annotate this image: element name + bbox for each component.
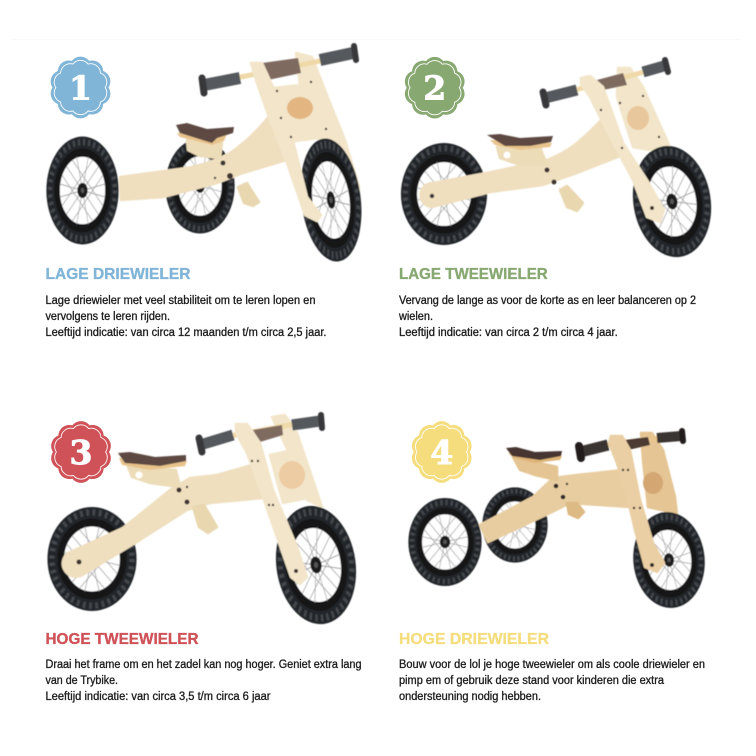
logo bbox=[287, 97, 313, 119]
right fork arm and panel bbox=[641, 433, 677, 515]
description: ondersteuning nodig hebben. bbox=[399, 691, 541, 703]
badge 4 bbox=[412, 421, 472, 483]
description: Leeftijd indicatie: van circa 2 t/m circa 4 jaar. bbox=[399, 327, 618, 339]
seat post bbox=[497, 147, 547, 165]
holes bbox=[76, 460, 298, 573]
left fork arm bbox=[581, 76, 664, 222]
right fork arm and panel bbox=[273, 53, 359, 208]
description: van de Trybike. bbox=[46, 675, 118, 687]
frame bbox=[63, 465, 263, 577]
seat post bbox=[187, 140, 222, 158]
left fork arm bbox=[251, 63, 321, 221]
heading: LAGE TWEEWIELER bbox=[399, 266, 548, 283]
description: pimp em of gebruik deze stand voor kinderen die extra bbox=[399, 675, 665, 687]
footrest tab bbox=[193, 505, 217, 533]
seat bbox=[490, 140, 552, 150]
logo bbox=[643, 472, 663, 494]
rear wheel bbox=[47, 507, 137, 611]
seat bbox=[508, 453, 562, 463]
bike photo 2 bbox=[401, 60, 719, 263]
badge 2 bbox=[405, 57, 465, 119]
handlebar bbox=[202, 46, 356, 93]
holes bbox=[554, 469, 654, 567]
handlebar bbox=[199, 415, 322, 452]
rear wheel bbox=[165, 138, 235, 234]
description bbox=[46, 295, 326, 339]
badge 3 bbox=[51, 421, 111, 483]
front wheel bbox=[294, 135, 368, 265]
logo bbox=[279, 461, 305, 489]
handlebar bbox=[543, 60, 668, 105]
footrest tab bbox=[567, 503, 584, 518]
footrest tab bbox=[560, 186, 583, 211]
frame bbox=[480, 470, 630, 542]
heading: HOGE TWEEWIELER bbox=[46, 631, 199, 648]
panel: lage driewieler bbox=[46, 46, 368, 339]
right fork arm and panel bbox=[270, 415, 322, 507]
left fork arm bbox=[236, 424, 307, 584]
heading: LAGE DRIEWIELER bbox=[46, 266, 191, 283]
badge 1 bbox=[51, 57, 110, 118]
badge 3: 3 bbox=[70, 433, 92, 472]
description: Draai het frame om en het zadel kan nog hoger. Geniet extra lang bbox=[46, 659, 362, 671]
description: wielen. bbox=[398, 311, 433, 323]
left wheel bbox=[46, 137, 119, 244]
rear wheel bbox=[401, 143, 487, 245]
heading: HOGE DRIEWIELER bbox=[399, 631, 549, 648]
holes bbox=[214, 81, 327, 179]
description bbox=[398, 295, 696, 339]
right fork arm and panel bbox=[617, 68, 670, 150]
panel: lage tweewieler bbox=[398, 57, 719, 339]
frame bbox=[421, 118, 623, 207]
logo bbox=[627, 106, 649, 130]
description: Leeftijd indicatie: van circa 12 maanden t/m circa 2,5 jaar. bbox=[46, 327, 326, 339]
seat post bbox=[128, 467, 180, 487]
handlebar bbox=[579, 431, 683, 458]
seat bbox=[119, 458, 187, 470]
front wheel bbox=[269, 501, 363, 629]
seat post bbox=[513, 457, 557, 480]
bike photo 1 bbox=[46, 46, 368, 265]
holes bbox=[430, 95, 660, 210]
description: Bouw voor de lol je hoge tweewieler om als coole driewieler en bbox=[399, 659, 705, 671]
description: Lage driewieler met veel stabiliteit om te leren lopen en bbox=[46, 295, 316, 307]
bike photo 3 bbox=[47, 415, 363, 629]
left wheel bbox=[408, 498, 482, 586]
seat bbox=[177, 133, 227, 145]
rear wheel bbox=[482, 487, 548, 563]
panel: hoge tweewieler bbox=[46, 415, 363, 703]
description bbox=[399, 659, 705, 703]
description: Leeftijd indicatie: van circa 3,5 t/m circa 6 jaar bbox=[46, 691, 271, 703]
left fork arm bbox=[609, 436, 664, 572]
description: vervolgens te leren rijden. bbox=[46, 311, 170, 323]
description: Vervang de lange as voor de korte as en leer balanceren op 2 bbox=[399, 295, 696, 307]
bike photo 4 bbox=[408, 431, 709, 611]
front wheel bbox=[625, 140, 719, 263]
panel: hoge driewieler bbox=[399, 421, 709, 703]
footrest tab bbox=[238, 183, 259, 206]
front wheel bbox=[629, 509, 709, 611]
description bbox=[46, 659, 362, 703]
badge 2: 2 bbox=[423, 69, 446, 108]
frame bbox=[120, 115, 293, 200]
badge 4: 4 bbox=[430, 433, 453, 472]
badge 1: 1 bbox=[69, 68, 92, 108]
